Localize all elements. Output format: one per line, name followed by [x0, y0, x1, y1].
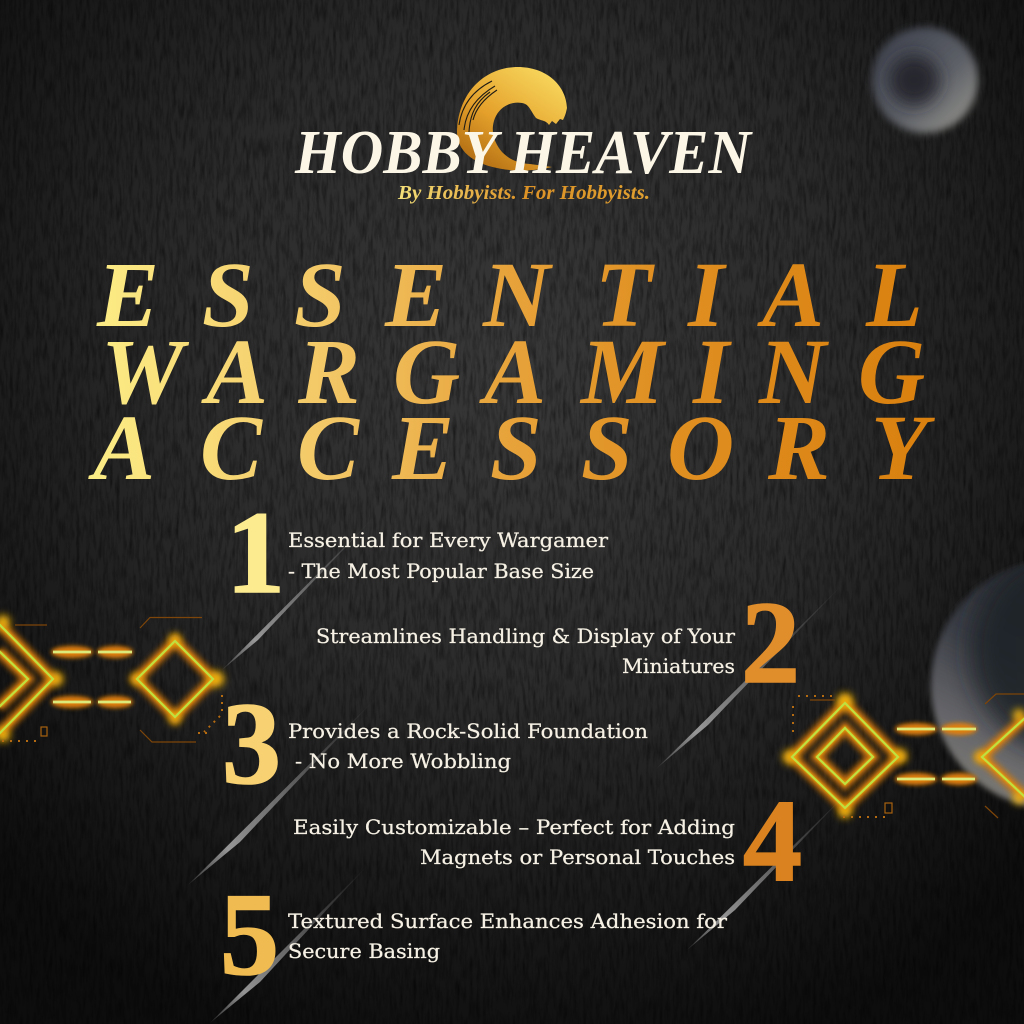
left neon lines [0, 624, 213, 734]
number 1: 1 [226, 487, 285, 618]
left neon halo [0, 624, 213, 734]
left dash glow [51, 646, 133, 708]
blurred orb top right [872, 27, 978, 133]
neon diamonds left [0, 615, 224, 742]
right decor lines [793, 694, 1024, 818]
right dash glow [895, 723, 977, 785]
item 4 text: Magnets or Personal Touches [420, 845, 735, 869]
number 3: 3 [222, 678, 281, 809]
title: WARGAMING [101, 321, 925, 424]
list item 5 [220, 869, 727, 1000]
list item 4 [293, 775, 802, 906]
icon: gold brush ring [457, 67, 567, 171]
item 1 text: Essential for Every Wargamer [288, 528, 608, 552]
item 2 text: Miniatures [622, 654, 735, 678]
number 4: 4 [743, 775, 802, 906]
list item 1 [226, 487, 608, 618]
item 3 text: - No More Wobbling [295, 749, 511, 773]
list item 2 [316, 577, 800, 708]
right neon glow [792, 703, 1024, 808]
item 4 text: Easily Customizable – Perfect for Adding [293, 815, 735, 839]
left decor lines [2, 618, 222, 742]
item 3 text: Provides a Rock-Solid Foundation [288, 719, 648, 743]
right neon hot spots [783, 693, 1024, 818]
right neon lines [792, 703, 1024, 808]
number 2: 2 [741, 577, 800, 708]
item 5 text: Secure Basing [288, 939, 440, 963]
title: ESSENTIAL [96, 244, 923, 347]
neon diamonds right [783, 693, 1024, 818]
item 5 text: Textured Surface Enhances Adhesion for [288, 909, 727, 933]
list item 3 [222, 678, 648, 809]
title [88, 244, 935, 500]
logo wordmark: HOBBY HEAVEN [294, 119, 753, 187]
title: ACCESSORY [88, 397, 935, 500]
number 5: 5 [220, 869, 279, 1000]
item 1 text: - The Most Popular Base Size [288, 559, 594, 583]
left neon hot spots [0, 615, 224, 742]
logo [294, 67, 753, 204]
right neon halo [792, 703, 1024, 808]
item 2 text: Streamlines Handling & Display of Your [316, 624, 735, 648]
diagonal light streaks [188, 513, 850, 1023]
logo tagline: By Hobbyists. For Hobbyists. [397, 182, 650, 204]
left neon glow [0, 624, 213, 734]
blurred orb right [931, 545, 1024, 809]
